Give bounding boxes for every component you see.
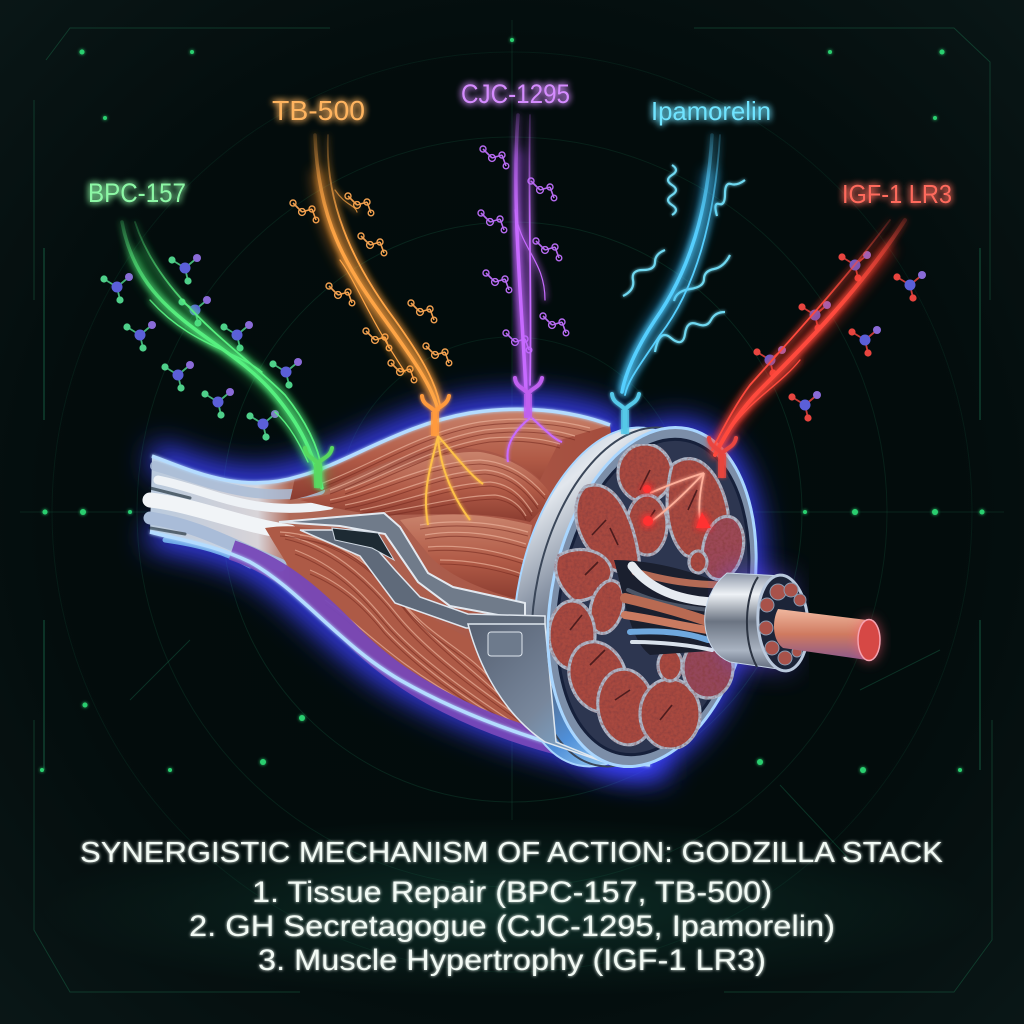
caption glow xyxy=(42,818,982,998)
front muscle bundle xyxy=(400,515,532,600)
plate rivet panel xyxy=(488,632,522,656)
circuit nodes xyxy=(40,38,984,773)
list item 3: 3. Muscle Hypertrophy (IGF-1 LR3) xyxy=(258,944,766,977)
peptide: TB-500 xyxy=(272,95,483,525)
label: IGF-1 LR3: IGF-1 LR3 xyxy=(842,179,952,209)
stream glow xyxy=(715,245,890,455)
upper metal strap xyxy=(279,513,525,620)
label: CJC-1295: CJC-1295 xyxy=(461,79,570,109)
receptor xyxy=(612,394,639,434)
receptor xyxy=(305,448,332,488)
tendon cables xyxy=(625,566,728,650)
stream glow xyxy=(135,250,322,480)
stream glow xyxy=(517,150,526,390)
receptor xyxy=(515,378,542,418)
muscle assembly xyxy=(150,399,881,795)
collar seam xyxy=(747,577,758,667)
peptide: BPC-157 xyxy=(88,178,332,488)
metal plate xyxy=(468,624,610,764)
caption block xyxy=(42,818,982,998)
rod glow xyxy=(857,618,881,662)
muscle glow halo xyxy=(150,409,650,765)
muscle fascicles xyxy=(549,444,749,749)
peptide squiggles xyxy=(623,165,745,352)
fascicle cracks xyxy=(570,470,697,720)
stream xyxy=(622,135,720,395)
upper muscle bundle xyxy=(290,409,610,500)
band seam xyxy=(502,409,762,785)
list item 2: 2. GH Secretagogue (CJC-1295, Ipamorelin) xyxy=(189,910,835,943)
peptide: CJC-1295 xyxy=(461,79,570,462)
list item 1: 1. Tissue Repair (BPC-157, TB-500) xyxy=(252,876,772,909)
receptor xyxy=(709,438,736,478)
molecules xyxy=(100,254,302,441)
rod xyxy=(774,609,867,660)
rod end xyxy=(858,620,880,660)
peptide: IGF-1 LR3 xyxy=(643,179,952,528)
dark muscle fibres xyxy=(280,423,590,734)
collar glow xyxy=(727,573,790,668)
lower metal strap xyxy=(300,530,545,628)
peptide: Ipamorelin xyxy=(612,96,771,434)
molecules xyxy=(753,251,926,422)
label: Ipamorelin: Ipamorelin xyxy=(651,96,771,126)
metal strap slot xyxy=(332,528,394,560)
inner tendrils xyxy=(507,418,562,462)
molecules xyxy=(290,193,452,383)
tendon strands xyxy=(150,466,330,566)
muscle body xyxy=(150,409,650,765)
label: TB-500: TB-500 xyxy=(272,95,365,126)
inner tendrils xyxy=(650,473,704,522)
stream glow xyxy=(318,170,438,410)
stream xyxy=(315,135,440,410)
stream xyxy=(712,220,905,455)
ring glow xyxy=(511,399,793,795)
middle muscle bundle xyxy=(300,452,552,522)
steel band xyxy=(484,409,744,785)
title: SYNERGISTIC MECHANISM OF ACTION: GODZILLA STACK xyxy=(80,837,944,869)
end ring xyxy=(518,408,786,786)
steel collar xyxy=(705,573,785,670)
label: BPC-157: BPC-157 xyxy=(88,178,186,208)
target points xyxy=(643,485,711,528)
stream xyxy=(515,115,545,390)
collar fascicle ring xyxy=(759,583,806,665)
stream xyxy=(122,222,322,488)
glowing outline xyxy=(150,409,650,765)
lower muscle bundle xyxy=(265,526,545,740)
lower sheath band xyxy=(232,550,570,748)
muscle cross-section face xyxy=(530,421,776,773)
light muscle fibres xyxy=(280,419,590,730)
receptor xyxy=(422,396,449,436)
inner tendrils xyxy=(426,436,483,525)
molecules xyxy=(478,146,569,353)
central cavity xyxy=(614,560,725,655)
stream glow xyxy=(622,170,710,392)
collar end face xyxy=(755,573,811,673)
